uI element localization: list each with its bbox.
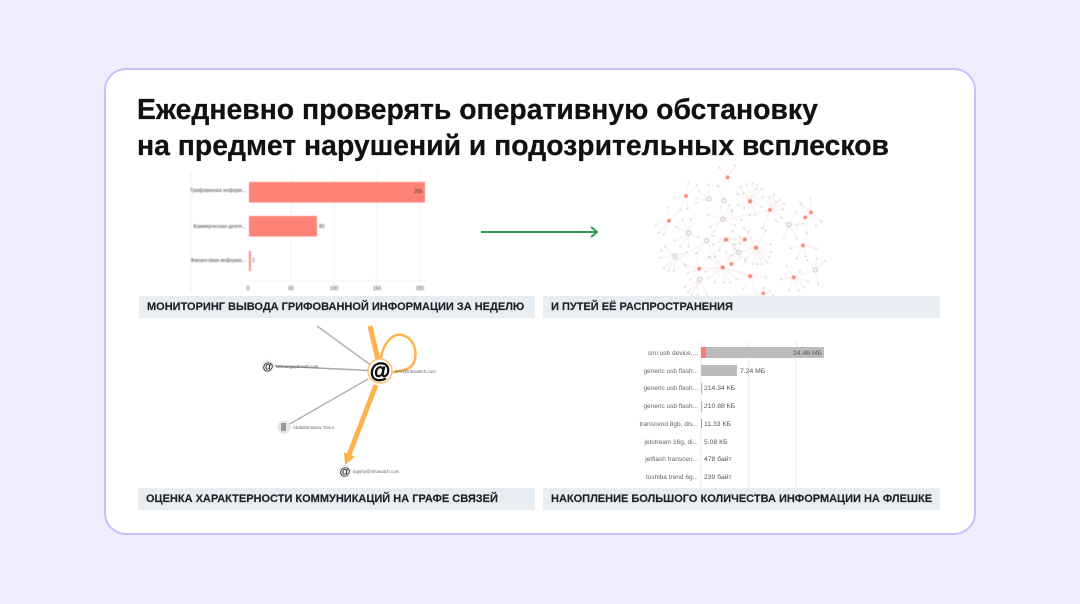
file volume bar chart: jetstream 16g, di... xyxy=(644,439,698,446)
file volume bar chart: generic usb flash... xyxy=(643,403,698,410)
file volume bar chart: 7.24 МБ xyxy=(740,368,766,375)
file volume bar chart: 239 байт xyxy=(704,473,732,481)
bar chart: classified information: 150 xyxy=(373,286,381,292)
title line 2: на предмет нарушений и подозрительных всплесков xyxy=(137,130,889,162)
file volume bar chart: 5.08 КБ xyxy=(704,439,728,446)
file volume bar chart: generic usb flash... xyxy=(643,368,698,375)
caption: flash drive xyxy=(543,488,940,510)
file volume bar chart: smi usb device,... xyxy=(648,350,698,357)
link graph: lehr@infowatch.com xyxy=(395,369,436,374)
caption: flash drive: НАКОПЛЕНИЕ БОЛЬШОГО КОЛИЧЕСТВА ИНФОРМАЦИИ НА ФЛЕШКЕ xyxy=(551,493,932,505)
bar chart: classified information: 100 xyxy=(330,286,338,292)
caption: monitoring xyxy=(139,296,535,318)
caption: spread paths xyxy=(543,296,940,318)
bar chart: classified information: Финансовая информа... xyxy=(191,258,246,264)
file volume bar chart: 11.33 КБ xyxy=(704,421,731,428)
bar chart: classified information: Коммерческая деяте... xyxy=(193,224,246,230)
caption: spread paths: И ПУТЕЙ ЕЁ РАСПРОСТРАНЕНИЯ xyxy=(551,301,733,313)
bar chart: classified information: 0 xyxy=(247,286,250,292)
file volume bar chart: 210.88 КБ xyxy=(704,403,736,410)
bar chart: classified information: Грифованная информ... xyxy=(190,188,246,194)
bar chart: classified information: 200 xyxy=(416,286,424,292)
caption: monitoring: МОНИТОРИНГ ВЫВОДА ГРИФОВАННОЙ ИНФОРМАЦИИ ЗА НЕДЕЛЮ xyxy=(147,301,524,313)
title line 1: Ежедневно проверять оперативную обстановку xyxy=(137,94,818,126)
file volume bar chart: transcend 8gb, dis... xyxy=(639,421,698,428)
bar chart: classified information: 80 xyxy=(319,224,325,230)
bar chart: classified information: 2 xyxy=(252,258,255,264)
link graph: @ xyxy=(263,361,274,373)
file volume bar chart: 214.34 КБ xyxy=(704,385,736,392)
panel: white card xyxy=(104,68,976,535)
link graph: @ xyxy=(340,466,351,478)
caption: communications xyxy=(138,488,535,510)
file volume bar chart: jetflash transcen... xyxy=(644,456,698,463)
link graph: logshy@infowatch.com xyxy=(353,469,400,474)
file volume bar chart: 24.46 МБ xyxy=(793,350,823,357)
file volume bar chart: generic usb flash... xyxy=(643,385,698,392)
file volume bar chart: 478 байт xyxy=(704,455,732,463)
file volume bar chart: toshiba trend 6g... xyxy=(646,474,698,481)
link graph: lahnangsprinvalt.com xyxy=(276,364,319,369)
link graph: Abdakhmanov Timur xyxy=(293,425,335,430)
link graph: @ xyxy=(370,360,390,383)
caption: communications: ОЦЕНКА ХАРАКТЕРНОСТИ КОММУНИКАЦИЙ НА ГРАФЕ СВЯЗЕЙ xyxy=(146,493,498,505)
bar chart: classified information: 50 xyxy=(288,286,294,292)
bar chart: classified information: 205 xyxy=(414,189,423,195)
